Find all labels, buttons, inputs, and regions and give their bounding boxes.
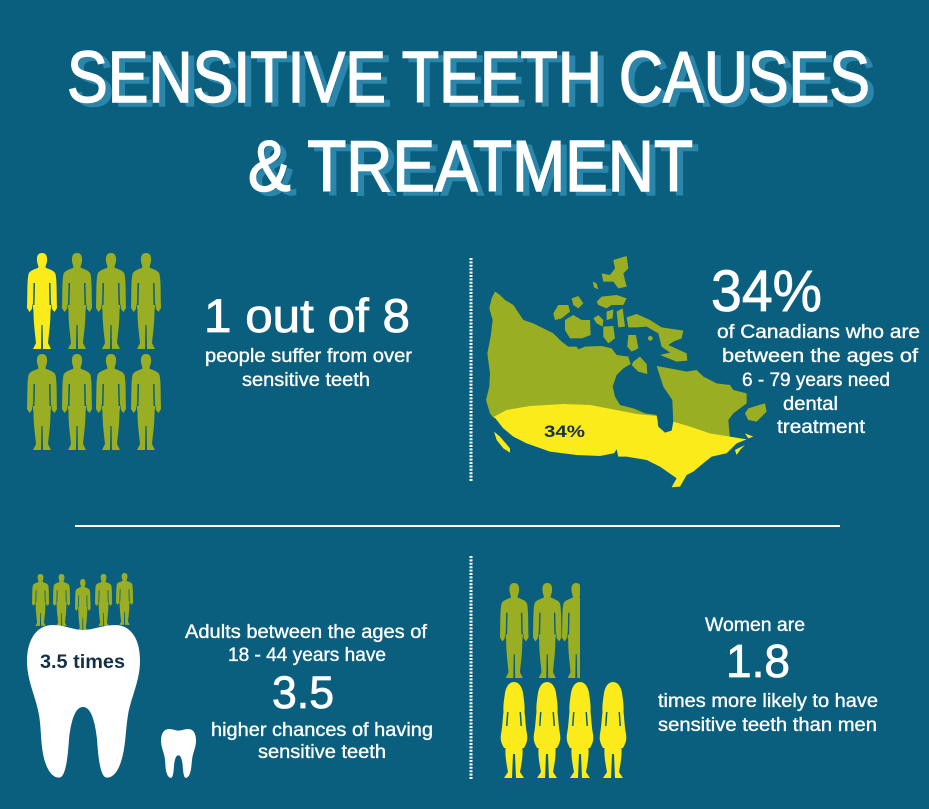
map label: 34%: 34%: [544, 422, 585, 441]
title: & TREATMENT: [248, 127, 693, 207]
description: women: Women are: [705, 615, 805, 636]
horizontal divider: [75, 525, 840, 527]
icon: large tooth: [27, 625, 140, 778]
description: Canadians: [717, 322, 920, 438]
stat text: 1 out of 8: 1 out of 8: [204, 289, 410, 342]
description: adults: 3.5: [272, 667, 334, 718]
icon group: men row: [500, 583, 580, 678]
panel: 1 out of 8: [27, 253, 413, 450]
icon group: eight men, one highlighted: [27, 253, 161, 450]
description: Canadians: 6 - 79 years need: [742, 370, 890, 391]
icon: small tooth: [161, 729, 196, 778]
description: Canadians: of Canadians who are: [717, 322, 920, 343]
description: Canadians: treatment: [777, 417, 866, 438]
panel: women 1.8: [500, 583, 878, 778]
description: adults: [185, 622, 433, 763]
description: people suffer: people suffer from over: [205, 346, 413, 367]
description: Canadians: dental: [783, 394, 838, 415]
description: adults: 18 - 44 years have: [228, 645, 386, 666]
description: adults: sensitive teeth: [258, 742, 386, 763]
map of Canada: [486, 256, 767, 487]
description: adults: higher chances of having: [211, 720, 433, 741]
vertical dotted divider top: [470, 258, 472, 482]
stat text: 34%: 34%: [711, 259, 822, 324]
description: people suffer: sensitive teeth: [242, 370, 370, 391]
description: women: times more likely to have: [658, 691, 878, 712]
vertical dotted divider bottom: [470, 556, 472, 780]
icon group: women row: [501, 682, 626, 778]
icon: five small men: [32, 573, 133, 631]
description: women: [658, 615, 878, 736]
panel: Canada 34%: [486, 256, 920, 487]
description: adults: Adults between the ages of: [185, 622, 428, 643]
description: women: sensitive teeth than men: [658, 715, 877, 736]
panel: adults 3.5 times: [27, 573, 433, 778]
description: people suffer: [205, 346, 413, 391]
description: Canadians: between the ages of: [722, 346, 919, 367]
tooth label: 3.5 times: 3.5 times: [40, 652, 125, 673]
title: & TREATMENT: [254, 131, 699, 211]
title: [67, 38, 876, 211]
description: women: 1.8: [726, 635, 790, 687]
